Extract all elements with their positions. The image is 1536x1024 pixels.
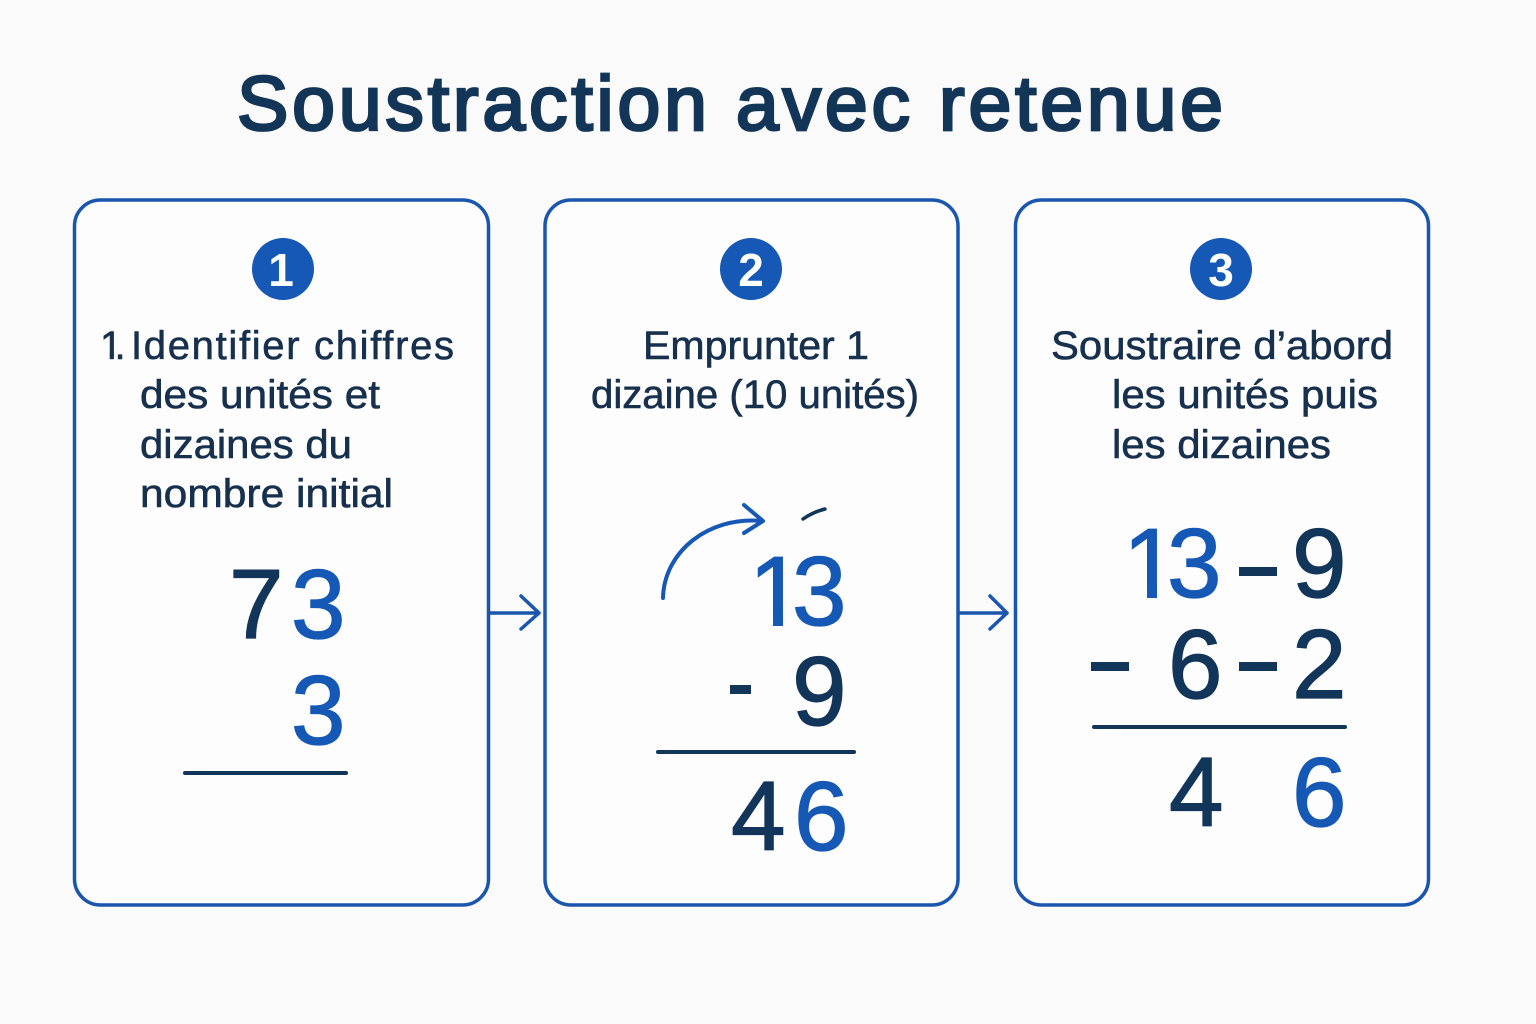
panel: step 3 — [1016, 200, 1428, 905]
step 3 text: les dizaines — [1112, 423, 1331, 467]
step 3 text: Soustraire d’abord — [1051, 324, 1393, 368]
number 13 — [758, 556, 843, 627]
step 1 text: Identifier chiffres — [131, 324, 454, 368]
result 4 and 6: 4 — [1169, 737, 1224, 847]
borrow arrow — [663, 505, 763, 598]
line minus 6 minus 2 — [1091, 609, 1347, 719]
line minus 6 minus 2: 2 — [1292, 609, 1347, 719]
icon: number 2 — [720, 238, 782, 300]
subtraction line — [658, 750, 854, 754]
line 13 minus 9: 9 — [1292, 508, 1347, 618]
line 13 minus 9: 3 — [1167, 508, 1222, 618]
step 1 text: . — [114, 324, 126, 368]
arrow 1 to 2 — [489, 596, 539, 629]
icon: number 2: 2 — [738, 244, 764, 296]
step 3 text — [1051, 324, 1393, 467]
icon: number 1 — [252, 238, 314, 300]
minus 9 — [730, 636, 847, 746]
result 46: 4 — [731, 761, 786, 871]
step 1 text: 1 — [100, 324, 122, 368]
step 3 text: les unités puis — [1112, 373, 1378, 417]
title: Soustraction avec retenue — [237, 61, 1223, 147]
arrow 2 to 3 — [959, 596, 1007, 629]
panel: step 2 — [545, 200, 958, 905]
panel: step 1 — [74, 200, 488, 905]
result 4 and 6: 6 — [1292, 737, 1347, 847]
number 73: 7 — [229, 549, 284, 659]
line 13 minus 9 — [1132, 528, 1342, 599]
result 46: 6 — [794, 761, 849, 871]
line 13 minus 9: 1 — [1123, 508, 1178, 618]
step 1 text: dizaines du — [140, 423, 352, 467]
number 13: 3 — [792, 536, 847, 646]
number 13: 1 — [749, 536, 804, 646]
icon: number 3 — [1190, 238, 1252, 300]
icon: number 1: 1 — [268, 244, 294, 296]
icon: number 3: 3 — [1208, 244, 1234, 296]
number 73: 3 — [291, 549, 346, 659]
step 1 text — [100, 324, 454, 516]
minus 9: 9 — [792, 636, 847, 746]
step 2 text — [591, 324, 919, 417]
step 2 text: dizaine (10 unités) — [591, 373, 919, 417]
step 1 text: des unités et — [140, 373, 380, 417]
number 3: 3 — [291, 655, 346, 765]
subtraction line — [185, 771, 346, 775]
subtraction line — [1094, 725, 1345, 729]
strike mark — [803, 509, 825, 519]
line minus 6 minus 2: 6 — [1168, 609, 1223, 719]
step 1 text: nombre initial — [140, 472, 393, 516]
step 2 text: Emprunter 1 — [643, 324, 869, 368]
